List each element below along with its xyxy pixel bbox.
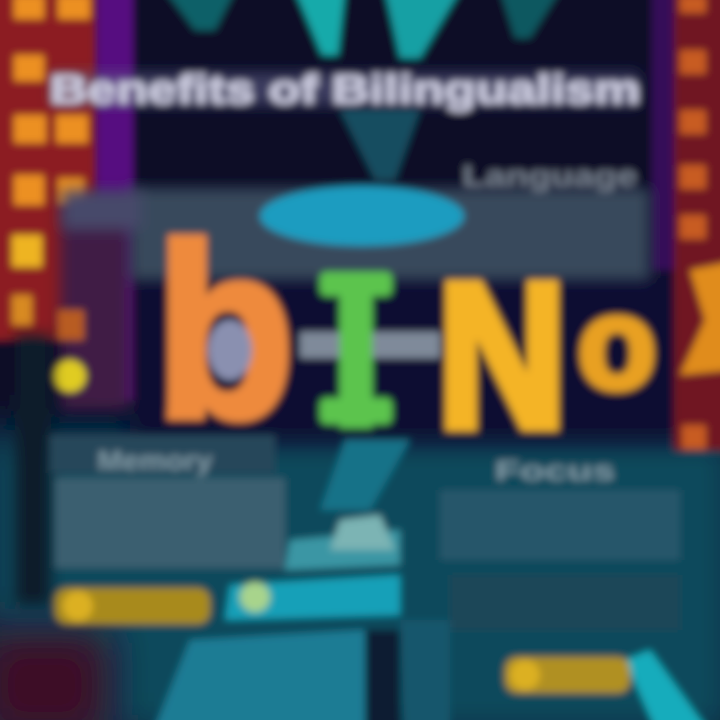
icon: top teal light beams xyxy=(165,0,560,180)
text: letter N: N xyxy=(438,241,566,470)
icon: teal ellipse xyxy=(260,186,464,246)
button: right yellow label xyxy=(505,657,630,693)
panel: lower left xyxy=(50,435,285,568)
icon: connector bars xyxy=(300,332,440,358)
icon: dark silhouette xyxy=(15,335,51,605)
icon: central teal path xyxy=(225,440,410,620)
button: left yellow label xyxy=(55,588,210,624)
text: letter b: b xyxy=(156,194,294,468)
text block: upper right heading: Language xyxy=(462,160,638,193)
text: lower left heading: Memory xyxy=(98,445,213,476)
icon: orange arrow xyxy=(680,262,720,375)
text: small symbol: o xyxy=(578,270,656,416)
icon: teal floor xyxy=(150,620,715,720)
heading: large letters xyxy=(156,194,720,470)
panel: upper band xyxy=(62,188,650,280)
text: letter I: I xyxy=(331,234,381,469)
panel: left decorative column xyxy=(0,0,133,605)
title: Benefits of Bilingualism xyxy=(50,68,640,112)
icon: yellow dot xyxy=(54,360,86,392)
icon: small glowing dot xyxy=(240,582,270,612)
panel: lower right xyxy=(440,455,680,630)
panel: right decorative column xyxy=(652,0,720,450)
text: lower right heading: Focus xyxy=(495,455,615,486)
